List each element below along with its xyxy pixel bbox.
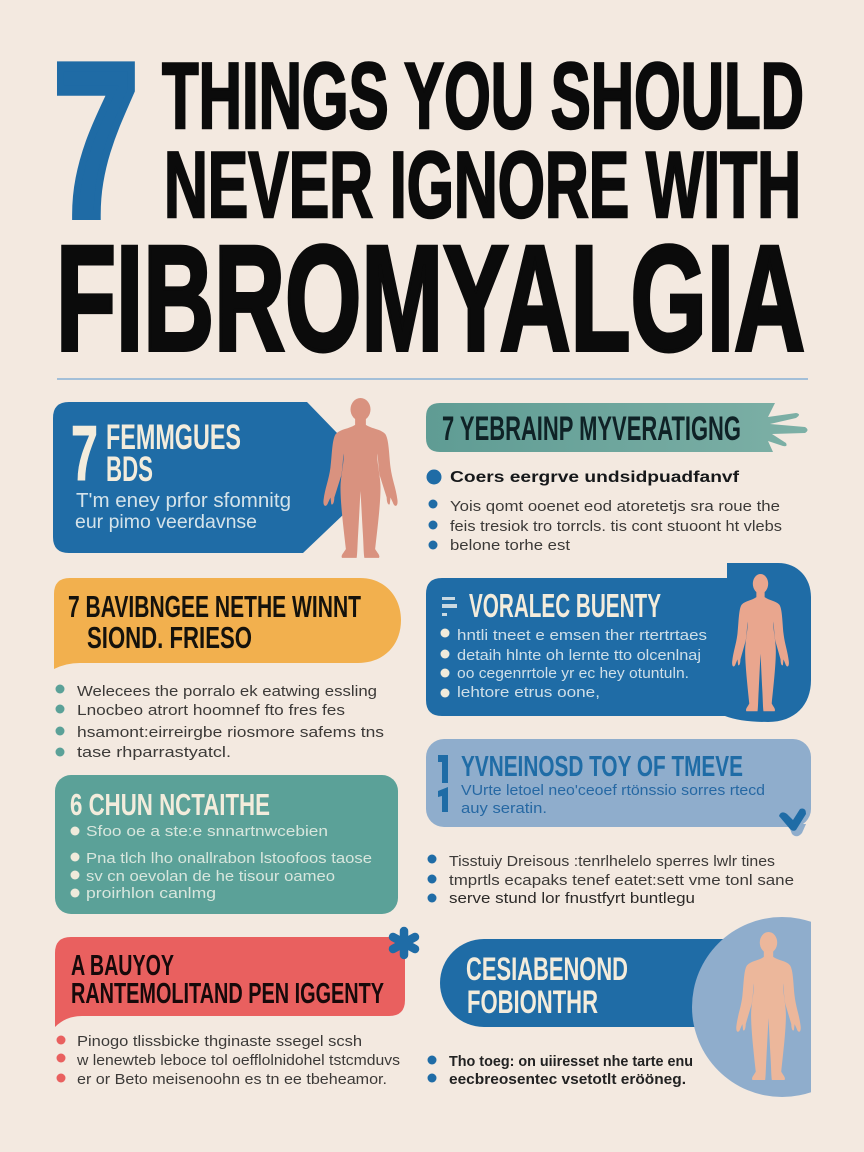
panel text: Sfoo oe a ste:e snnartnwcebien	[86, 823, 328, 840]
list: pill bullets	[428, 1053, 693, 1088]
list: banner bullets: Coers eergrve undsidpuadfanvf	[450, 469, 740, 486]
list: orange card bullets	[56, 683, 384, 761]
icon: body figure	[732, 574, 789, 711]
list: red card bullets: w lenewteb leboce tol oefflolnidohel tstcmduvs	[76, 1052, 400, 1069]
circle backdrop	[692, 917, 811, 1097]
panel: blue pill with circle figure	[440, 917, 811, 1097]
panel text: Pna tlch lho onallrabon lstoofoos taose	[86, 850, 372, 867]
panel text: oo cegenrrtole yr ec hey otuntuln.	[457, 665, 689, 682]
panel: orange speech card: SIOND. FRIESO	[87, 620, 252, 655]
list: light blue card bullets: tmprtls ecapaks tenef eatet:sett vme tonl sane	[449, 872, 794, 889]
panel: red speech card: RANTEMOLITAND PEN IGGENTY	[71, 978, 384, 1010]
list: orange card bullets: tase rhparrastyatcl.	[77, 744, 231, 761]
list: orange card bullets: hsamont:eirreirgbe riosmore safems tns	[77, 724, 384, 741]
list: light blue card bullets: serve stund lor fnustfyrt buntlegu	[449, 890, 695, 907]
list: banner bullets: feis tresiok tro torrcls. tis cont stuoont ht vlebs	[450, 518, 782, 535]
panel heading: YVNEINOSD TOY OF TMEVE	[461, 751, 743, 783]
panel: teal card	[55, 775, 398, 914]
panel text: lehtore etrus oone,	[457, 684, 600, 701]
panel: red speech card	[55, 931, 415, 1027]
list: orange card bullets: Lnocbeo atrort hoomnef fto fres fes	[77, 702, 345, 719]
panel heading: CESIABENOND	[466, 951, 628, 987]
list: red card bullets: Pinogo tlissbicke thginaste ssegel scsh	[77, 1033, 362, 1050]
panel heading: A BAUYOY	[71, 950, 174, 982]
panel heading: 7 BAVIBNGEE NETHE WINNT	[68, 589, 361, 624]
panel: blue pill with circle figure: FOBIONTHR	[467, 984, 598, 1020]
panel: blue arrow card with figure: eur pimo veerdavnse	[75, 512, 257, 533]
panel text: VUrte letoel neo'ceoef rtönssio sorres rtecd	[461, 782, 765, 799]
panel heading: 6 CHUN NCTAITHE	[70, 787, 270, 822]
icon: body figure	[736, 932, 801, 1080]
panel text: proirhlon canlmg	[86, 885, 216, 902]
panel text: T'm eney prfor sfomnitg	[76, 490, 291, 512]
list: pill bullets: eecbreosentec vsetotlt erööneg.	[449, 1071, 686, 1088]
panel text	[457, 627, 707, 701]
panel: light blue card	[426, 739, 811, 836]
panel text: sv cn oevolan de he tisour oameo	[86, 868, 335, 885]
panel: light blue card: auy seratin.	[461, 800, 547, 817]
panel: orange speech card	[54, 578, 401, 669]
panel: teal banner	[426, 403, 808, 452]
list: light blue card bullets	[428, 853, 794, 907]
icon: body figure	[323, 398, 398, 558]
panel bullets	[440, 628, 450, 698]
panel text: detaih hlnte oh lernte tto olcenlnaj	[457, 647, 701, 664]
list: orange card bullets: Welecees the porralo ek eatwing essling	[77, 683, 377, 700]
panel number: 7	[71, 409, 98, 497]
icon: list lines	[442, 597, 457, 616]
list: light blue card bullets: Tisstuiy Dreisous :tenrlhelelo sperres lwlr tines	[449, 853, 775, 870]
panel heading: FEMMGUES	[106, 418, 241, 457]
panel: blue card with figure	[426, 563, 811, 722]
panel bullets	[70, 826, 80, 898]
panel text	[86, 823, 372, 902]
icon: blue asterisk	[393, 931, 415, 955]
panel heading: VORALEC BUENTY	[469, 587, 661, 624]
title	[54, 19, 805, 382]
big blue seven: 7	[54, 19, 138, 261]
list: banner bullets: belone torhe est	[450, 537, 571, 554]
list: red card bullets	[56, 1033, 400, 1088]
panel: blue arrow card with figure: BDS	[106, 450, 153, 489]
panel number	[438, 755, 448, 812]
list: pill bullets: Tho toeg: on uiiresset nhe tarte enu	[449, 1053, 693, 1070]
list: banner bullets: Yois qomt ooenet eod atoretetjs sra roue the	[450, 498, 780, 515]
panel text: hntli tneet e emsen ther rtertrtaes	[457, 627, 707, 644]
list: banner bullets	[426, 469, 782, 554]
panel: blue arrow card with figure	[53, 398, 398, 558]
icon: check heart	[779, 809, 806, 836]
list: red card bullets: er or Beto meisenoohn es tn ee tbeheamor.	[77, 1071, 387, 1088]
